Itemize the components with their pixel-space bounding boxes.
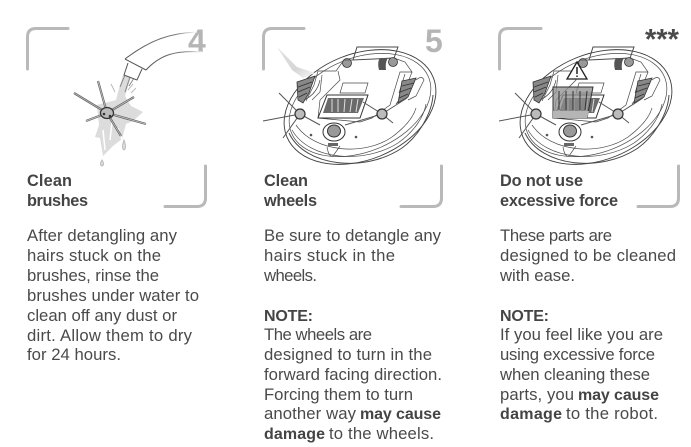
heading: clean brushes: brushes	[27, 192, 88, 210]
cleaning bay	[340, 83, 368, 93]
panel: clean brushes	[27, 23, 206, 364]
text block: wheels instructions	[263, 226, 442, 285]
text block: wheels note	[264, 308, 442, 443]
text block: force instructions: designed to be cleaned	[500, 246, 676, 265]
heading: clean brushes: Clean	[27, 172, 72, 190]
text block: force instructions	[499, 226, 676, 285]
icon: robot underside with wheels	[263, 28, 453, 186]
text block: wheels note: another way	[264, 404, 357, 423]
text block: force note: damage	[500, 406, 562, 423]
text block: wheels note: may cause	[360, 406, 441, 423]
text block: force note: to the robot.	[566, 404, 658, 423]
panel: clean wheels	[263, 23, 453, 443]
text block: wheels instructions: hairs stuck in the	[264, 246, 395, 265]
front caster	[323, 123, 345, 141]
text block: wheels instructions: Be sure to detangle any	[264, 226, 442, 245]
step number 4: 4	[188, 23, 206, 59]
heading: do not use excessive force: excessive force	[500, 192, 618, 210]
text block: wheels note: damage	[264, 426, 325, 443]
text block: wheels note: The wheels are	[264, 325, 372, 344]
heading: do not use excessive force: Do not use	[500, 172, 583, 190]
text block: wheels note: designed to turn in the	[264, 345, 432, 364]
text block: force note: may cause	[578, 387, 659, 404]
text block: wheels instructions: wheels.	[263, 266, 317, 285]
text block: force note: using excessive force	[500, 345, 655, 364]
heading: clean brushes	[27, 172, 88, 210]
text block: wheels note: Forcing them to turn	[264, 385, 413, 404]
text block: brushes instructions: brushes, rinse the	[27, 266, 159, 285]
text block: force note: when cleaning these	[499, 365, 650, 384]
text block: force note: NOTE:	[500, 308, 549, 325]
text block: brushes instructions: hairs stuck on the	[27, 246, 161, 265]
text block: force note: If you feel like you are	[500, 325, 663, 344]
bottom-right corner bracket	[401, 166, 442, 206]
heading: clean wheels: Clean	[264, 172, 308, 190]
bottom-right corner bracket	[638, 166, 678, 206]
icon: spray on wheel	[277, 47, 315, 78]
side brushes	[263, 93, 407, 138]
text block: force note: parts, you	[500, 385, 574, 404]
text block: brushes instructions: After detangling any	[27, 226, 178, 245]
icon: robot underside with warning	[499, 28, 689, 186]
warning asterisks: ***	[645, 24, 680, 56]
heading: clean wheels: wheels	[263, 192, 317, 210]
step number 5: 5	[425, 23, 443, 59]
icon: warning triangle	[567, 62, 587, 79]
top-left corner bracket	[264, 28, 304, 69]
top-left corner bracket	[500, 28, 541, 69]
text block: wheels note: NOTE:	[264, 308, 313, 325]
text block: force instructions: These parts are	[500, 226, 612, 245]
heading: do not use excessive force	[500, 172, 618, 210]
right wheel	[398, 78, 416, 103]
highlighted cleaning bay	[553, 87, 593, 118]
heading: clean wheels	[263, 172, 317, 210]
text block: brushes instructions: for 24 hours.	[27, 345, 121, 364]
text block: brushes instructions: clean off any dust or	[27, 306, 177, 325]
top-left corner bracket	[28, 28, 68, 69]
text block: wheels note: forward facing direction.	[264, 365, 442, 384]
bottom-right corner bracket	[165, 166, 206, 206]
text block: brushes instructions: dirt. Allow them to dry	[27, 326, 193, 345]
text block: force note	[499, 308, 663, 423]
panel: do not use excessive force	[499, 24, 689, 423]
text block: wheels note: to the wheels.	[329, 424, 434, 443]
text block: brushes instructions	[27, 226, 199, 364]
text block: brushes instructions: brushes under water to	[27, 286, 199, 305]
left wheel	[297, 76, 315, 103]
icon: brush rinsed under faucet	[74, 32, 202, 166]
text block: force instructions: with ease.	[499, 266, 575, 285]
body	[267, 28, 453, 186]
